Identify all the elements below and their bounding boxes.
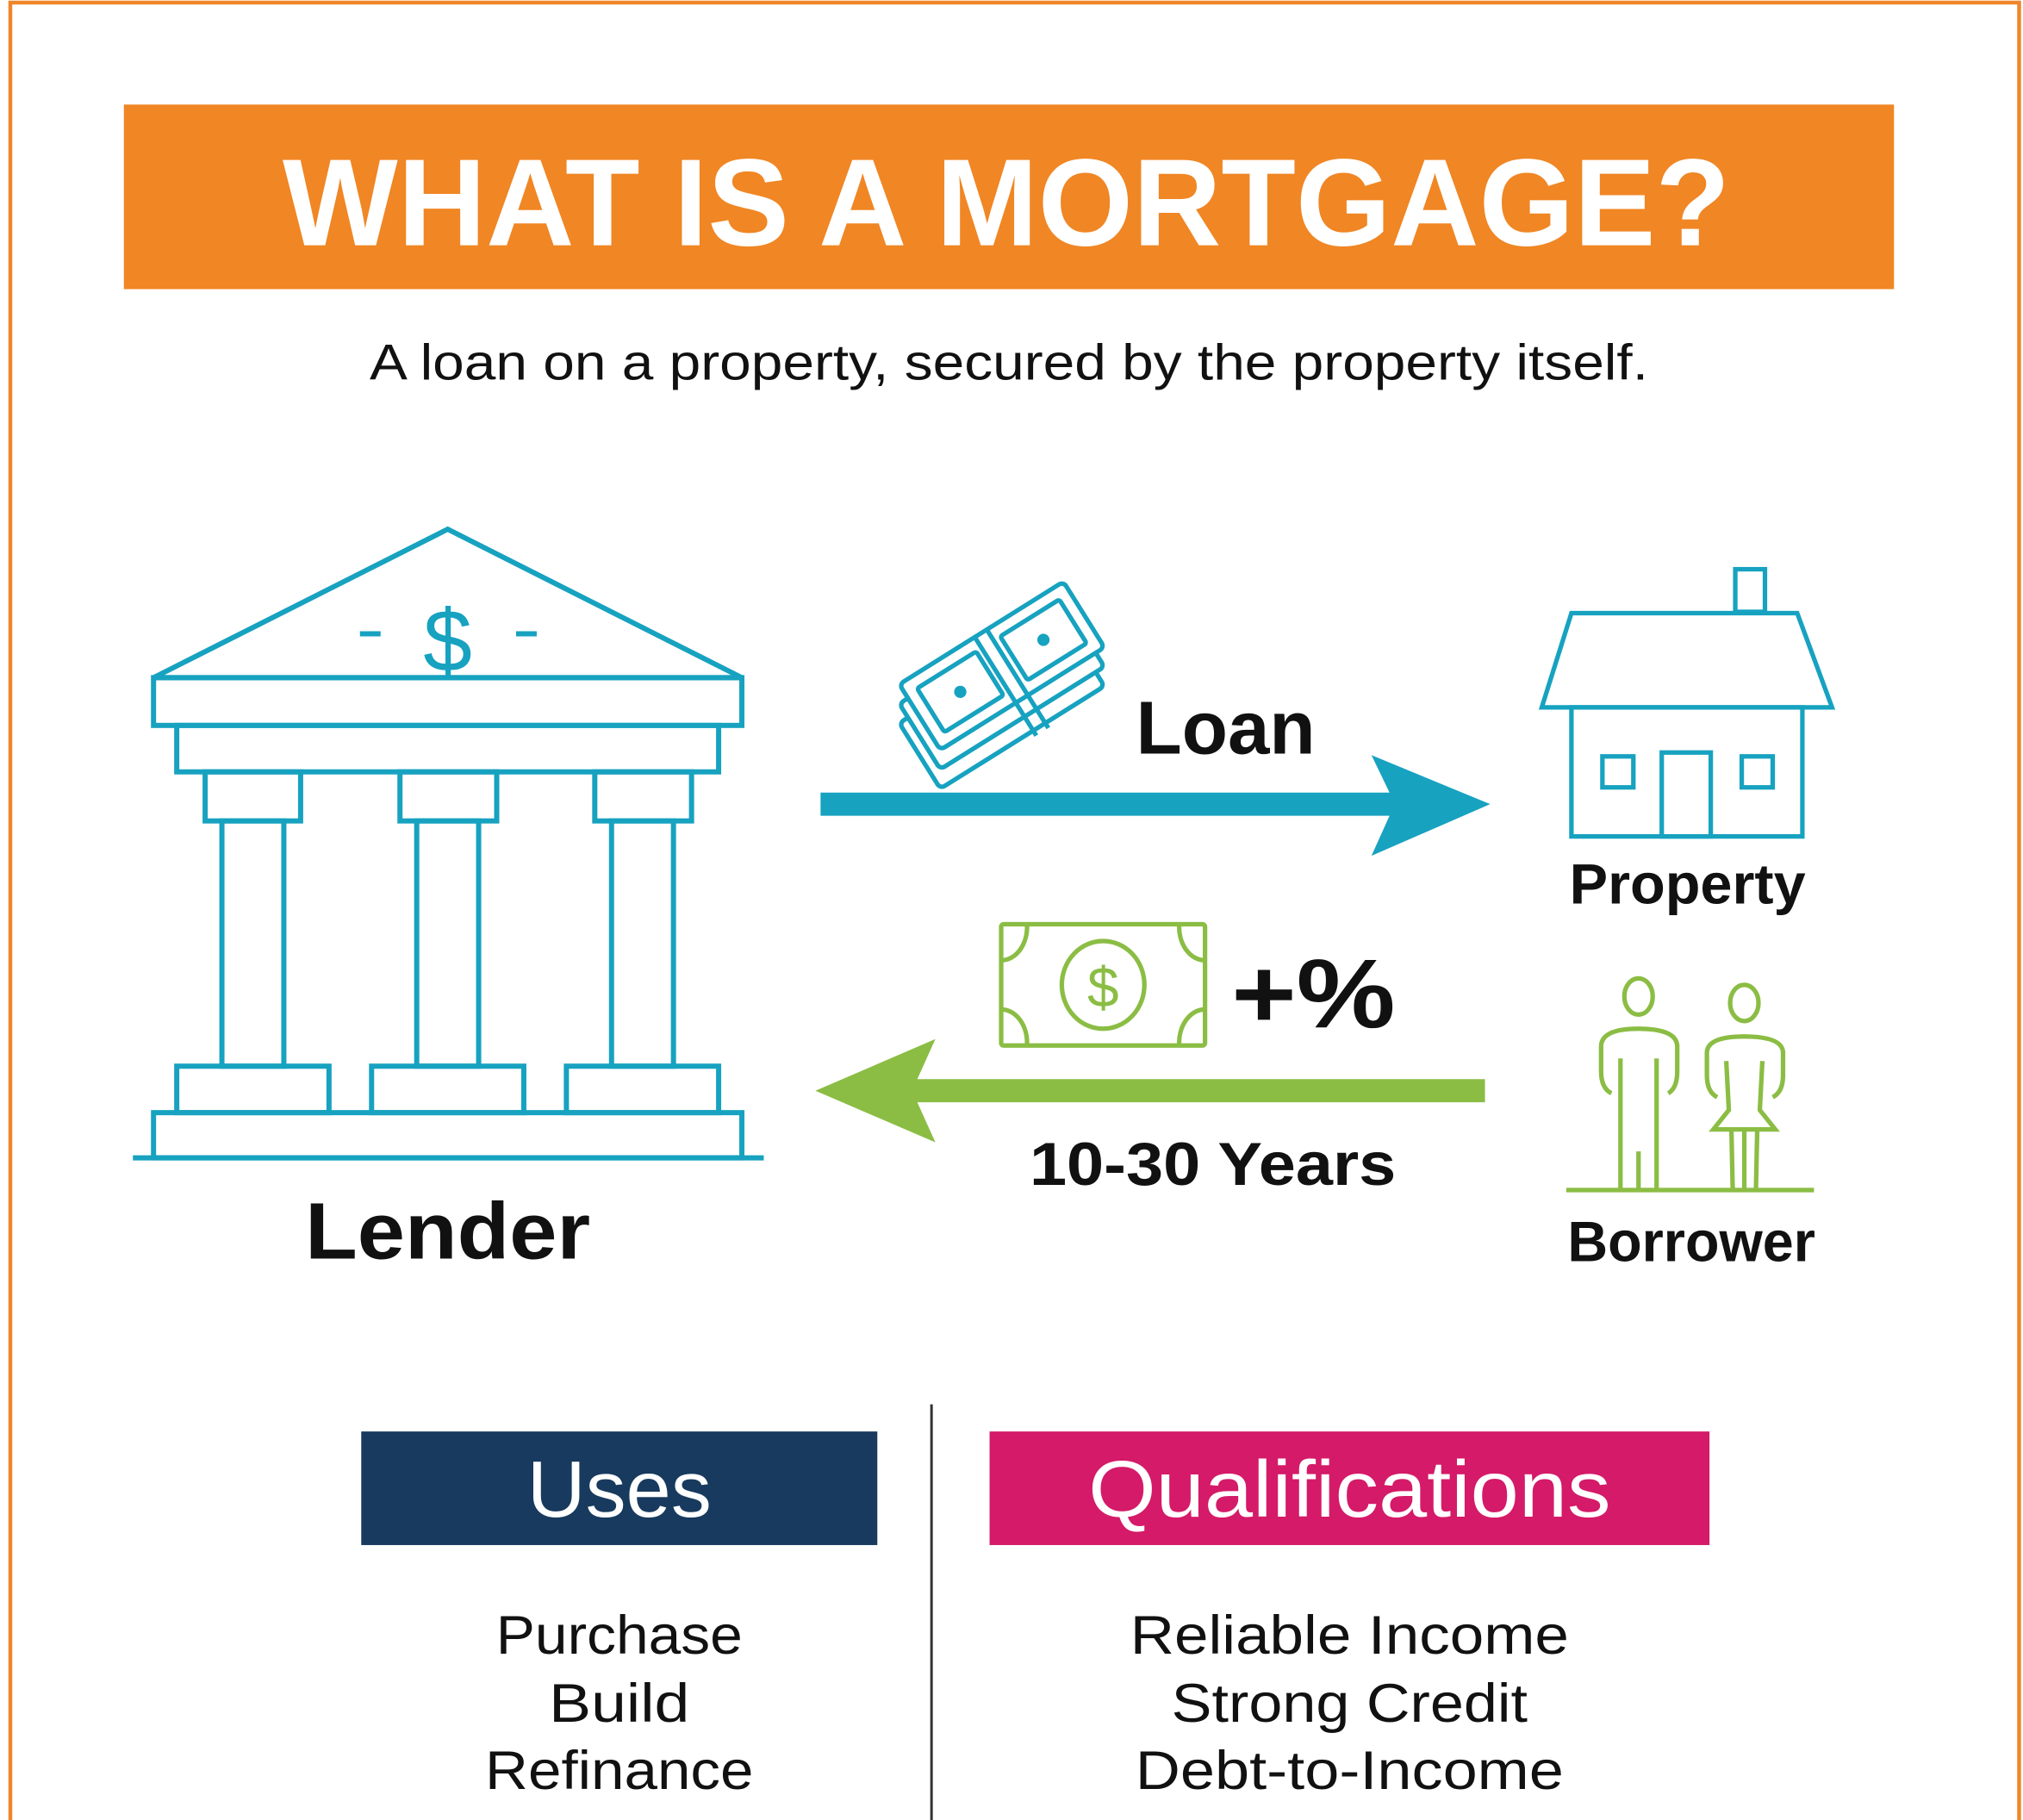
panel: qualifications: Strong Credit <box>1172 1674 1528 1734</box>
divider <box>931 1405 932 1820</box>
panel: uses: Uses <box>527 1444 712 1534</box>
years label: 10-30 Years <box>1030 1130 1396 1198</box>
panel: uses: Purchase <box>496 1605 743 1666</box>
panel: qualifications: Debt-to-Income <box>1136 1741 1564 1801</box>
panel: uses: Refinance <box>485 1741 754 1801</box>
arrow: repayment to lender <box>815 1039 1485 1143</box>
icon: green bill <box>1001 924 1205 1045</box>
borrower label: Borrower <box>1567 1209 1815 1273</box>
loan label: Loan <box>1136 687 1316 770</box>
icon: bank (lender): $ <box>423 592 472 690</box>
icon: money stack <box>899 582 1125 788</box>
icon: borrowers <box>1566 978 1814 1190</box>
property label: Property <box>1570 852 1806 916</box>
icon: house <box>1541 570 1832 837</box>
icon: green bill: $ <box>1087 955 1119 1019</box>
arrow: loan to property <box>820 755 1491 856</box>
plus percent label: +% <box>1231 939 1395 1049</box>
panel: qualifications <box>990 1431 1709 1801</box>
title banner: WHAT IS A MORTGAGE? <box>283 134 1730 272</box>
icon: bank (lender) <box>133 529 763 1158</box>
panel: uses <box>361 1431 877 1801</box>
panel: qualifications: Qualifications <box>1088 1444 1611 1534</box>
title banner <box>124 104 1894 290</box>
subtitle: A loan on a property, secured by the property itself. <box>370 334 1648 390</box>
lender label: Lender <box>305 1186 590 1275</box>
panel: uses: Build <box>549 1674 689 1734</box>
panel: qualifications: Reliable Income <box>1130 1605 1569 1666</box>
